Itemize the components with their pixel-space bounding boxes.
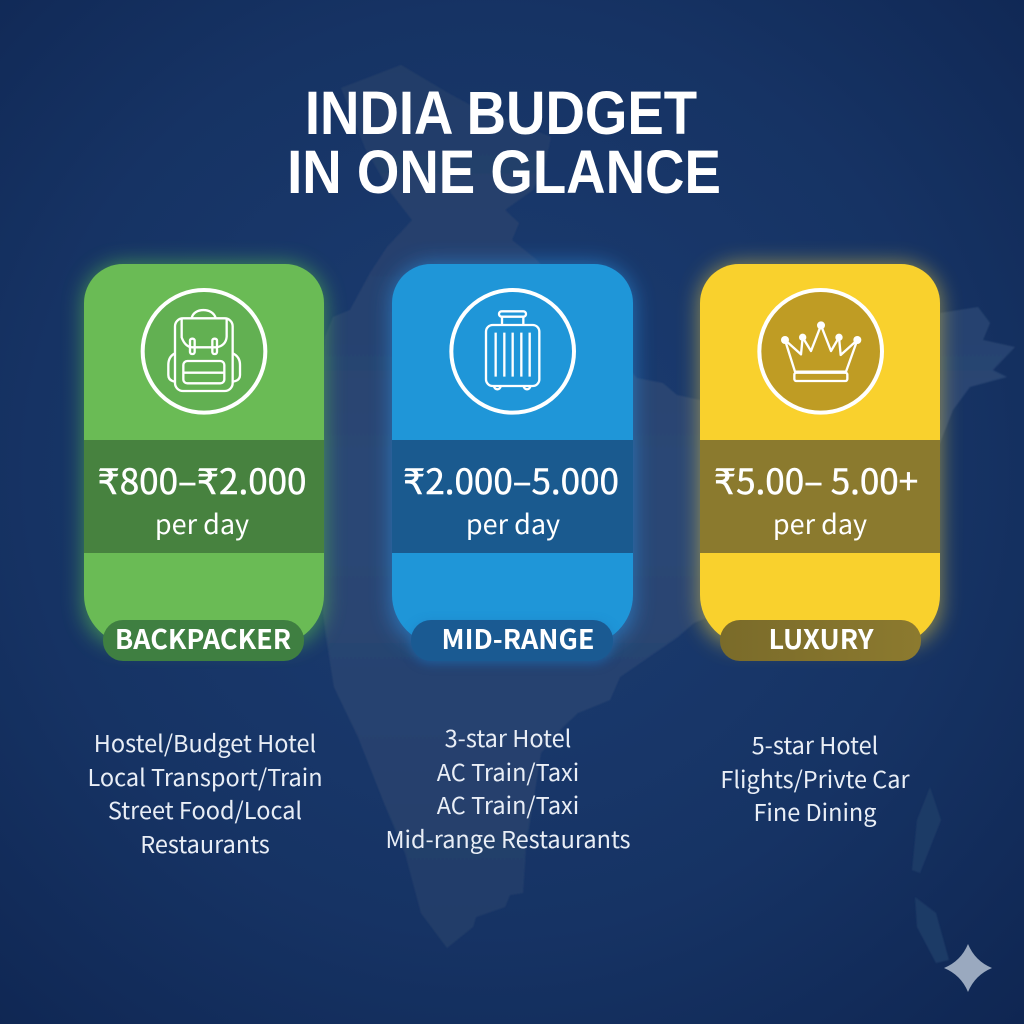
label: backpacker: BACKPACKER — [115, 618, 291, 657]
price: mid-range: ₹2.000–5.000 — [403, 454, 619, 505]
features: mid-range — [385, 720, 631, 855]
price band — [700, 440, 940, 553]
features: backpacker — [87, 725, 323, 860]
icon: suitcase — [449, 288, 576, 415]
features: luxury: Fine Dining — [753, 794, 877, 828]
panel: luxury — [700, 264, 940, 645]
panel: backpacker — [84, 264, 324, 645]
per day: mid-range: per day — [466, 503, 560, 542]
features: mid-range: Mid-range Restaurants — [385, 821, 631, 855]
panel: mid-range — [392, 264, 633, 645]
label background: backpacker — [103, 620, 304, 661]
icon: sparkle — [944, 944, 992, 992]
icon: crown — [757, 288, 884, 415]
features: backpacker: Restaurants — [140, 826, 270, 860]
price band — [84, 440, 324, 553]
card glows — [84, 264, 940, 645]
price: backpacker: ₹800–₹2.000 — [97, 454, 306, 505]
features: backpacker: Hostel/Budget Hotel — [94, 725, 316, 759]
label background: mid-range — [411, 620, 613, 661]
title — [287, 79, 721, 206]
features: luxury: 5-star Hotel — [752, 727, 878, 761]
per day: backpacker: per day — [155, 503, 249, 542]
label: mid-range: MID-RANGE — [442, 618, 594, 657]
features: mid-range: AC Train/Taxi — [437, 754, 579, 788]
features: backpacker: Street Food/Local — [108, 792, 302, 826]
price: luxury: ₹5.00– 5.00+ — [714, 454, 918, 505]
features: mid-range: 3-star Hotel — [445, 720, 571, 754]
features: backpacker: Local Transport/Train — [87, 759, 323, 793]
label background: luxury — [720, 620, 921, 661]
icon: backpack — [140, 288, 268, 415]
title: INDIA BUDGET — [305, 79, 697, 147]
label: luxury: LUXURY — [768, 618, 873, 657]
title: IN ONE GLANCE — [287, 138, 721, 206]
features: mid-range: AC Train/Taxi — [437, 787, 579, 821]
price band — [392, 440, 633, 553]
features: luxury — [720, 727, 910, 828]
per day: luxury: per day — [773, 503, 867, 542]
features: luxury: Flights/Privte Car — [720, 761, 910, 795]
